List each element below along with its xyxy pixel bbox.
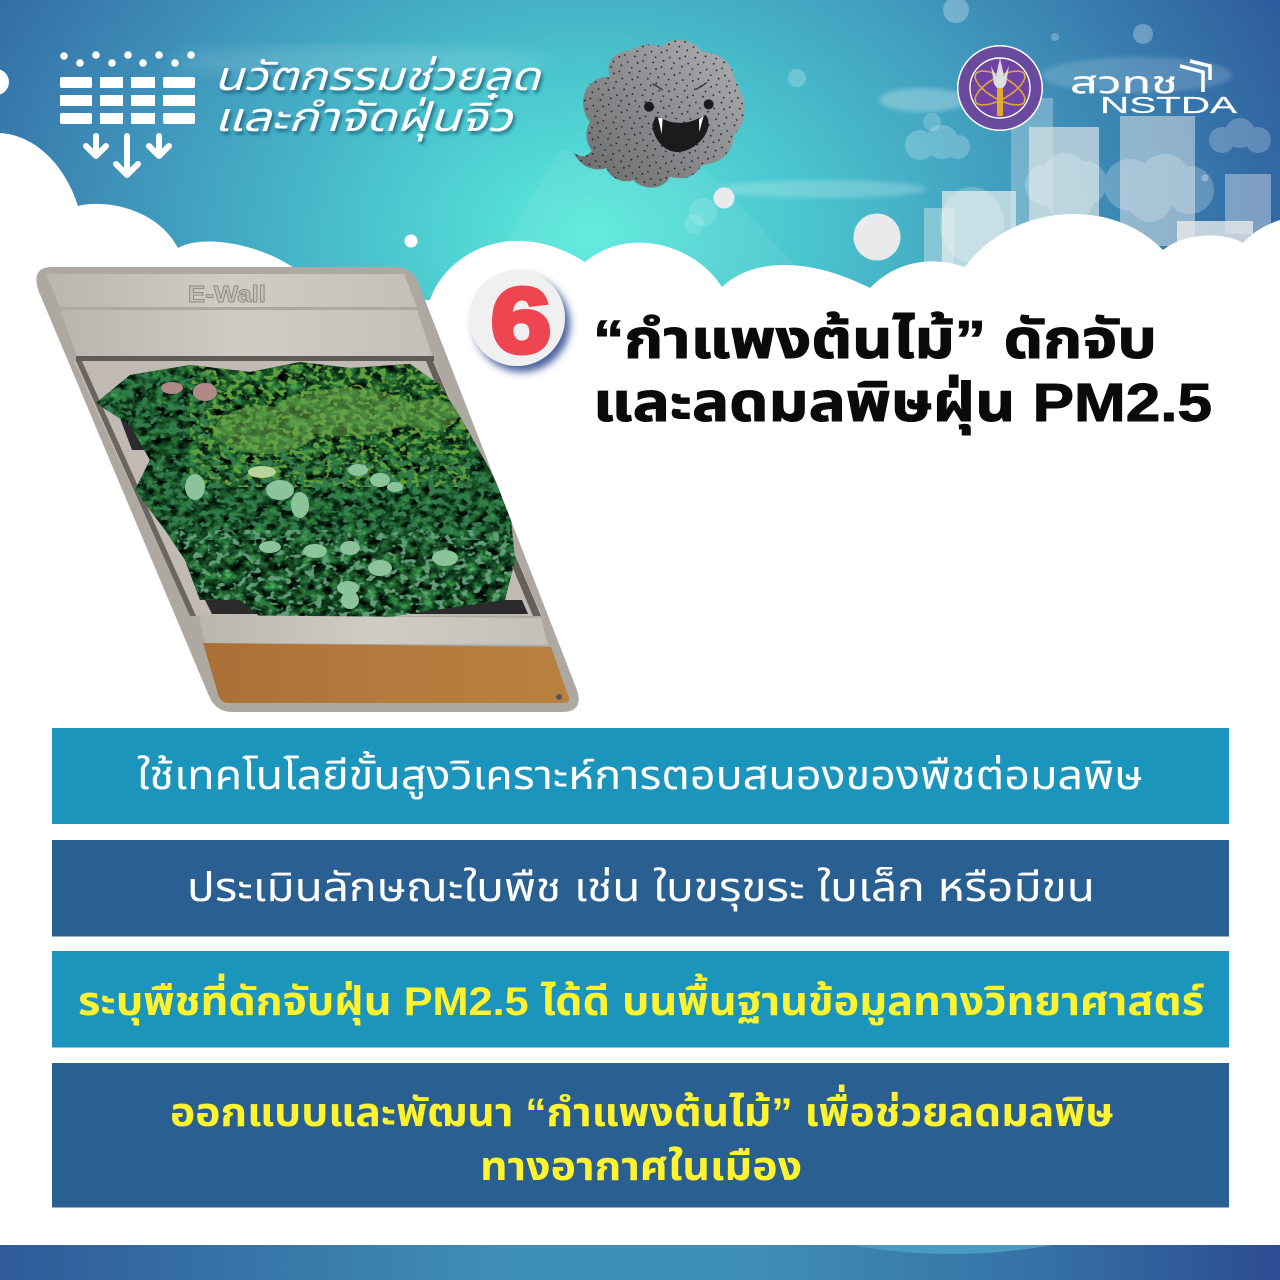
back plate bbox=[74, 361, 542, 616]
mascot: PM2.5 dust cloud bbox=[573, 40, 745, 188]
info bar 2: ประเมินลักษณะใบพืช เช่น ใบขรุขระ ใบเล็ก หรือมีขน bbox=[187, 866, 1095, 911]
logo: NSTDA: NSTDA bbox=[1100, 92, 1238, 118]
heading bbox=[593, 310, 1212, 435]
info bar 1 bbox=[52, 728, 1229, 824]
bottom bar bbox=[0, 1245, 1280, 1280]
top steel plate bbox=[46, 274, 417, 307]
header title: และกำจัดฝุ่นจิ๋ว bbox=[214, 92, 514, 142]
header title: นวัตกรรมช่วยลด bbox=[214, 55, 542, 99]
info bar 2 bbox=[52, 840, 1229, 936]
wood panel bbox=[203, 643, 569, 703]
info bar 4: ทางอากาศในเมือง bbox=[480, 1145, 802, 1189]
photo: E-Wall green wall bbox=[30, 260, 590, 720]
white dust particles bbox=[0, 69, 900, 260]
logo: NSTDA: สวทช bbox=[1070, 67, 1178, 100]
heading: “กำแพงต้นไม้” ดักจับ bbox=[593, 310, 1157, 370]
info bar 4 bbox=[52, 1063, 1229, 1208]
info bar 3: ระบุพืชที่ดักจับฝุ่น PM2.5 ได้ดี บนพื้นฐานข้อมูลทางวิทยาศาสตร์ bbox=[78, 973, 1204, 1026]
plant pots bbox=[120, 418, 528, 614]
number badge 6: 6 bbox=[491, 270, 551, 372]
header title bbox=[214, 55, 542, 142]
city skyline bbox=[905, 98, 1271, 271]
info bar 4: ออกแบบและพัฒนา “กำแพงต้นไม้” เพื่อช่วยลดมลพิษ bbox=[170, 1084, 1114, 1135]
plants bbox=[96, 362, 515, 617]
background gradient panel bbox=[0, 0, 1280, 300]
icon: air filter with falling dust bbox=[60, 51, 195, 175]
heading: และลดมลพิษฝุ่น PM2.5 bbox=[593, 373, 1212, 435]
E-Wall engraved label: E-Wall bbox=[188, 281, 266, 307]
logo: NSTDA bbox=[1070, 61, 1238, 118]
info bar 3 bbox=[52, 951, 1229, 1048]
bottom steel plate bbox=[199, 615, 548, 645]
logo: ministry seal bbox=[957, 45, 1043, 131]
info bar 1: ใช้เทคโนโลยีขั้นสูงวิเคราะห์การตอบสนองของพืชต่อมลพิษ bbox=[137, 750, 1143, 799]
number badge 6 bbox=[469, 270, 565, 372]
